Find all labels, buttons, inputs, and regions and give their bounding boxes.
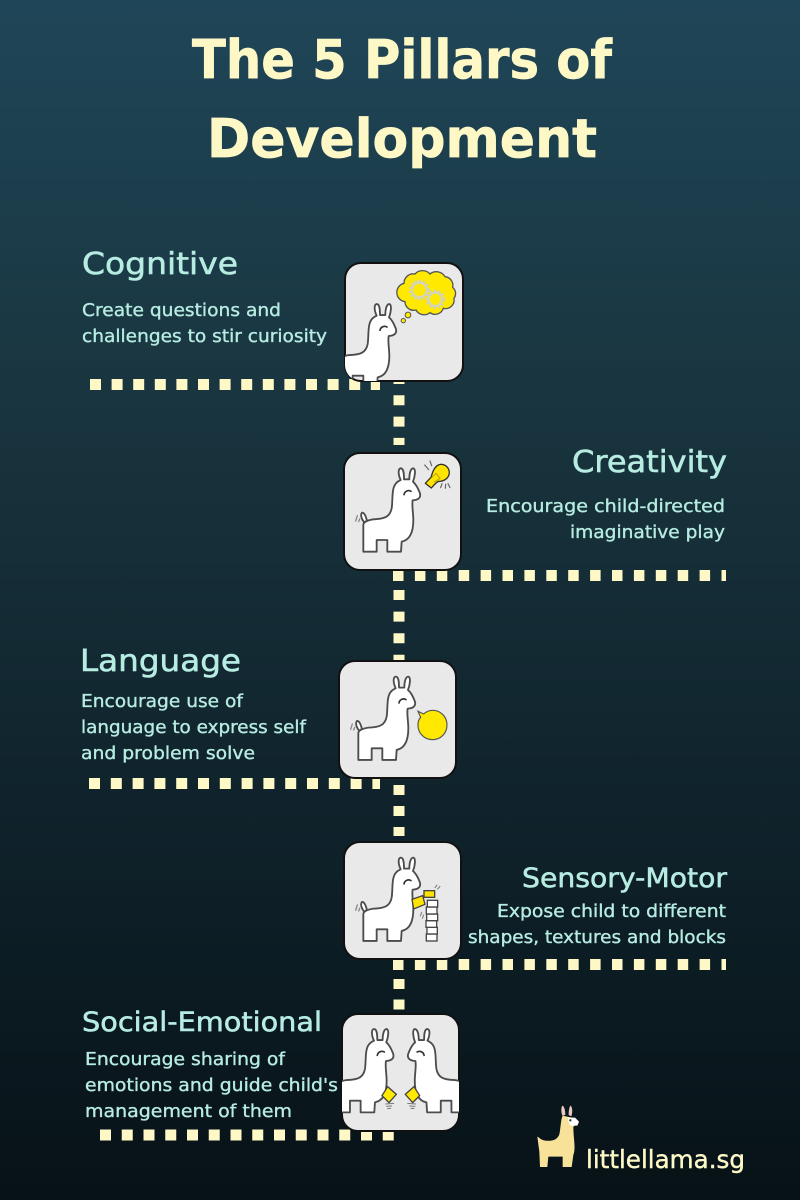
heading: language: Language [80, 644, 241, 679]
dotted connector path [89, 374, 726, 1135]
text: creativity description [486, 497, 725, 543]
icon: llama with light bulb [344, 453, 461, 570]
heading: creativity: Creativity [572, 445, 727, 480]
panel: language [80, 644, 456, 778]
text: cognitive description [82, 301, 327, 347]
text: social-emotional description [85, 1050, 338, 1122]
icon: llama with speech bubble [339, 661, 456, 778]
panel: social-emotional [82, 1007, 465, 1131]
logo: littlellama.sg [537, 1106, 745, 1174]
panel: sensory-motor [344, 842, 728, 959]
text: language description: Encourage use of [81, 692, 244, 712]
text: creativity description: imaginative play [570, 523, 725, 543]
title [192, 28, 613, 170]
text: social-emotional description: Encourage sharing of [85, 1050, 286, 1070]
icon: llama thinking [339, 263, 463, 387]
text: social-emotional description: management of them [85, 1102, 292, 1122]
heading: cognitive: Cognitive [82, 247, 238, 282]
text: sensory-motor description [468, 902, 726, 948]
panel: cognitive [82, 247, 463, 387]
text: sensory-motor description: Expose child to different [497, 902, 726, 922]
title: Development [207, 107, 597, 170]
text: language description: language to express self [81, 718, 307, 738]
heading: social-emotional: Social-Emotional [82, 1007, 322, 1038]
icon: llama stacking blocks [344, 842, 461, 959]
text: social-emotional description: emotions and guide child's [85, 1076, 338, 1096]
text: cognitive description: challenges to stir curiosity [82, 327, 327, 347]
heading: sensory-motor: Sensory-Motor [522, 863, 728, 894]
panel: creativity [344, 445, 727, 570]
text: language description [81, 692, 307, 764]
icon: logo llama [537, 1106, 579, 1167]
text: logo wordmark: littlellama.sg [586, 1145, 745, 1174]
text: cognitive description: Create questions and [82, 301, 281, 321]
text: creativity description: Encourage child-directed [486, 497, 725, 517]
title: The 5 Pillars of [192, 28, 613, 91]
text: sensory-motor description: shapes, textures and blocks [468, 928, 726, 948]
text: language description: and problem solve [81, 744, 255, 764]
icon: two llamas sharing [337, 1014, 465, 1131]
